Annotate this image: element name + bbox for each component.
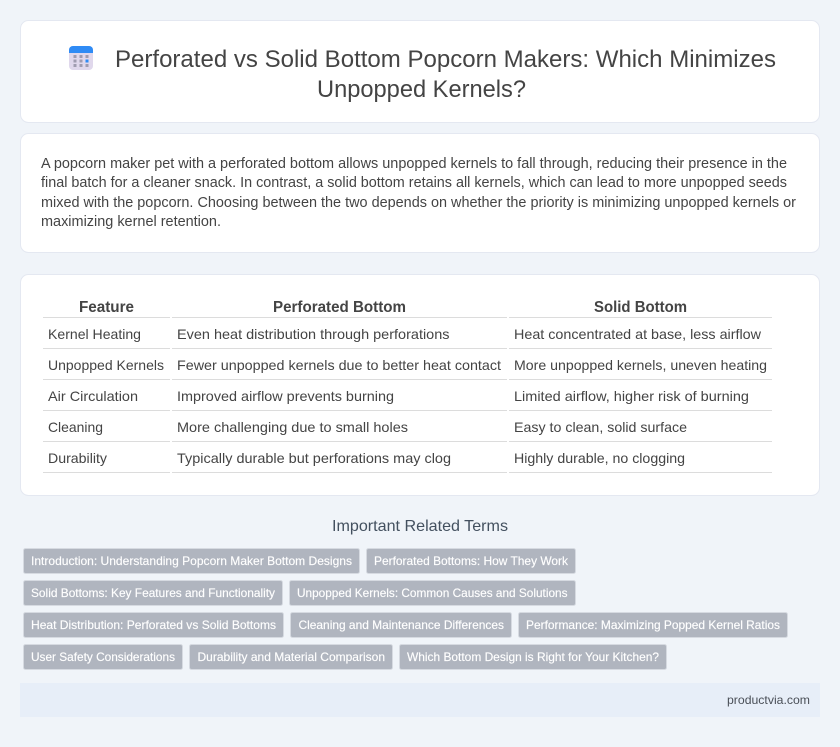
icon: calendar grid (69, 46, 93, 70)
table row: kernel heating (48, 326, 762, 342)
tag: Durability and Material Comparison (198, 650, 385, 664)
text block: introduction: final batch for a cleaner snack. In contrast, a solid bottom retains all kernels, which can lead to more unpopped seeds (41, 175, 787, 191)
table row: cleaning: More challenging due to small holes (177, 419, 408, 435)
table header: Perforated Bottom (273, 299, 406, 316)
tag: Heat Distribution: Perforated vs Solid Bottoms (31, 618, 276, 632)
table header: Solid Bottom (594, 299, 687, 316)
tag (366, 548, 576, 574)
tag (24, 612, 284, 638)
table row: air circulation: Limited airflow, higher risk of burning (514, 388, 749, 404)
related term tags (24, 548, 788, 670)
table row: unpopped kernels: More unpopped kernels, uneven heating (514, 357, 767, 373)
tag: Introduction: Understanding Popcorn Maker Bottom Designs (31, 554, 352, 568)
tag: Perforated Bottoms: How They Work (374, 554, 569, 568)
tag (190, 644, 392, 670)
table row: durability: Typically durable but perforations may clog (177, 450, 451, 466)
heading: important related terms: Important Related Terms (332, 518, 508, 535)
tag: Which Bottom Design is Right for Your Kitchen? (407, 650, 659, 664)
title: Perforated vs Solid Bottom Popcorn Makers: Which Minimizes (115, 46, 776, 73)
table header: Feature (79, 299, 134, 316)
text block: introduction: maximizing kernel retention. (41, 214, 221, 230)
table row: unpopped kernels: Fewer unpopped kernels due to better heat contact (177, 357, 501, 373)
tag (290, 612, 512, 638)
table row: unpopped kernels (48, 357, 767, 373)
table row: air circulation: Improved airflow prevents burning (177, 388, 394, 404)
table row: kernel heating: Even heat distribution through perforations (177, 326, 449, 342)
footer bar (20, 683, 820, 717)
table row: cleaning: Cleaning (48, 419, 103, 435)
title (115, 46, 776, 103)
text block: introduction (41, 156, 796, 230)
table row: kernel heating: Heat concentrated at base, less airflow (514, 326, 762, 342)
table row: air circulation (48, 388, 749, 404)
table row: kernel heating: Kernel Heating (48, 326, 141, 342)
table row: unpopped kernels: Unpopped Kernels (48, 357, 164, 373)
table row: cleaning (48, 419, 687, 435)
tag (24, 644, 182, 670)
panel: header (20, 20, 820, 122)
tag: Cleaning and Maintenance Differences (298, 618, 504, 632)
tag (24, 548, 360, 574)
tag (518, 612, 788, 638)
table row: durability: Highly durable, no clogging (514, 450, 685, 466)
panel: introduction text (20, 134, 820, 252)
tag (400, 644, 666, 670)
text block: introduction: mixed with the popcorn. Choosing between the two depends on whether the priority is minimizing unpopped kernels or (41, 195, 796, 211)
table row: durability (48, 450, 685, 466)
tag: Unpopped Kernels: Common Causes and Solutions (297, 586, 568, 600)
text block: introduction: A popcorn maker pet with a perforated bottom allows unpopped kernels to fall through, reducing their presence in the (41, 156, 787, 172)
tag (290, 580, 576, 606)
table row: durability: Durability (48, 450, 107, 466)
title: Unpopped Kernels? (317, 76, 526, 103)
tag (24, 580, 282, 606)
table row: air circulation: Air Circulation (48, 388, 138, 404)
table row: cleaning: Easy to clean, solid surface (514, 419, 687, 435)
tag: User Safety Considerations (31, 650, 175, 664)
table header (79, 299, 687, 316)
panel: comparison table (20, 274, 820, 496)
tag: Solid Bottoms: Key Features and Functionality (31, 586, 275, 600)
tag: Performance: Maximizing Popped Kernel Ratios (526, 618, 780, 632)
footer source: productvia.com (727, 693, 810, 707)
